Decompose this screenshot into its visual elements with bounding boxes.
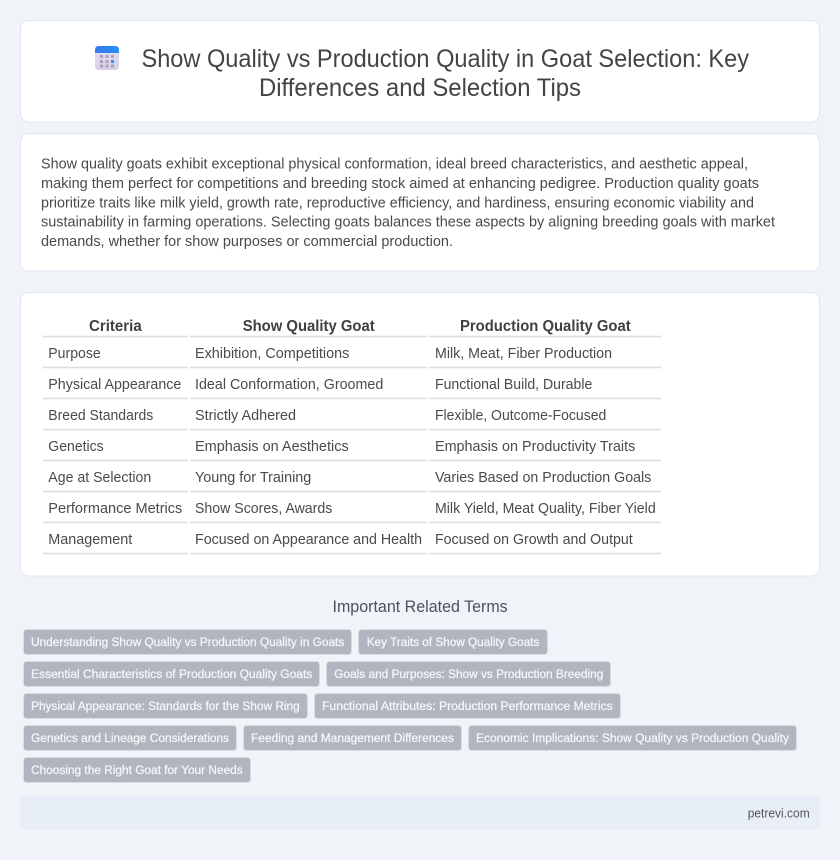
table row: purpose	[48, 346, 612, 362]
text block: summary: Show quality goats exhibit exceptional physical conformation, ideal breed characteristics, and aesthetic appeal,	[41, 156, 748, 172]
tag	[314, 694, 620, 718]
table row: genetics: Emphasis on Productivity Traits	[435, 439, 635, 455]
tag	[326, 662, 610, 686]
footer: site name: petrevi.com	[748, 806, 810, 820]
panel: comparison table	[20, 292, 820, 576]
tag	[468, 726, 796, 750]
tag: Economic Implications: Show Quality vs Production Quality	[476, 731, 790, 745]
text block: summary	[41, 156, 775, 250]
table row: management: Focused on Appearance and Health	[195, 532, 422, 548]
table row: performance metrics: Milk Yield, Meat Quality, Fiber Yield	[435, 501, 656, 517]
text block: summary: demands, whether for show purposes or commercial production.	[41, 234, 453, 250]
footer bar	[20, 796, 820, 830]
icon: calendar grid	[95, 46, 119, 70]
tag: Functional Attributes: Production Performance Metrics	[322, 699, 613, 713]
table header row: Show Quality Goat	[243, 318, 375, 335]
table row: management	[48, 532, 633, 548]
tag: Understanding Show Quality vs Production Quality in Goats	[31, 635, 344, 649]
table row: management: Management	[48, 532, 132, 548]
tag: Physical Appearance: Standards for the Show Ring	[31, 699, 300, 713]
table row: genetics	[48, 439, 635, 455]
tag	[24, 694, 308, 718]
table row: management: Focused on Growth and Output	[435, 532, 633, 548]
tag	[24, 726, 236, 750]
table row: physical appearance: Functional Build, Durable	[435, 377, 592, 393]
tag: Goals and Purposes: Show vs Production Breeding	[334, 667, 603, 681]
tag	[24, 630, 352, 654]
panel: summary paragraph	[20, 134, 820, 271]
table header row	[89, 318, 631, 335]
table row: age at selection: Varies Based on Production Goals	[435, 470, 651, 486]
tag list: related terms	[24, 630, 796, 782]
table row: performance metrics: Show Scores, Awards	[195, 501, 332, 517]
tag: Genetics and Lineage Considerations	[31, 731, 229, 745]
table row: age at selection: Age at Selection	[48, 470, 151, 486]
table row: breed standards	[48, 408, 606, 424]
tag	[24, 662, 320, 686]
table row: breed standards: Strictly Adhered	[195, 408, 296, 424]
tag: Feeding and Management Differences	[251, 731, 454, 745]
table row: physical appearance: Ideal Conformation, Groomed	[195, 377, 383, 393]
table row: purpose: Purpose	[48, 346, 101, 362]
table row: purpose: Milk, Meat, Fiber Production	[435, 346, 612, 362]
tag: Essential Characteristics of Production Quality Goats	[31, 667, 312, 681]
table row: breed standards: Flexible, Outcome-Focused	[435, 408, 606, 424]
table header row: Criteria	[89, 318, 142, 335]
table row: breed standards: Breed Standards	[48, 408, 153, 424]
title	[142, 45, 749, 102]
title: Differences and Selection Tips	[259, 74, 581, 102]
tag	[244, 726, 462, 750]
tag: Key Traits of Show Quality Goats	[367, 635, 539, 649]
table row: genetics: Emphasis on Aesthetics	[195, 439, 349, 455]
table row: purpose: Exhibition, Competitions	[195, 346, 349, 362]
table row: age at selection: Young for Training	[195, 470, 311, 486]
title: Show Quality vs Production Quality in Goat Selection: Key	[142, 45, 749, 73]
tag: Choosing the Right Goat for Your Needs	[31, 763, 243, 777]
text block: summary: prioritize traits like milk yield, growth rate, reproductive efficiency, and hardiness, ensuring economic viability and	[41, 196, 754, 212]
text block: summary: making them perfect for competitions and breeding stock aimed at enhancing pedigree. Production quality goats	[41, 176, 759, 192]
table row: genetics: Genetics	[48, 439, 104, 455]
table row: performance metrics	[48, 501, 656, 517]
table row: physical appearance: Physical Appearance	[48, 377, 181, 393]
table row: physical appearance	[48, 377, 592, 393]
tag	[358, 630, 548, 654]
table row: performance metrics: Performance Metrics	[48, 501, 182, 517]
tag	[24, 758, 250, 782]
text block: summary: sustainability in farming operations. Selecting goats balances these aspects by aligning breeding goals with market	[41, 215, 775, 231]
heading: important related terms: Important Related Terms	[332, 598, 508, 616]
table row: age at selection	[48, 470, 651, 486]
header panel	[20, 20, 820, 122]
table header row: Production Quality Goat	[460, 318, 631, 335]
